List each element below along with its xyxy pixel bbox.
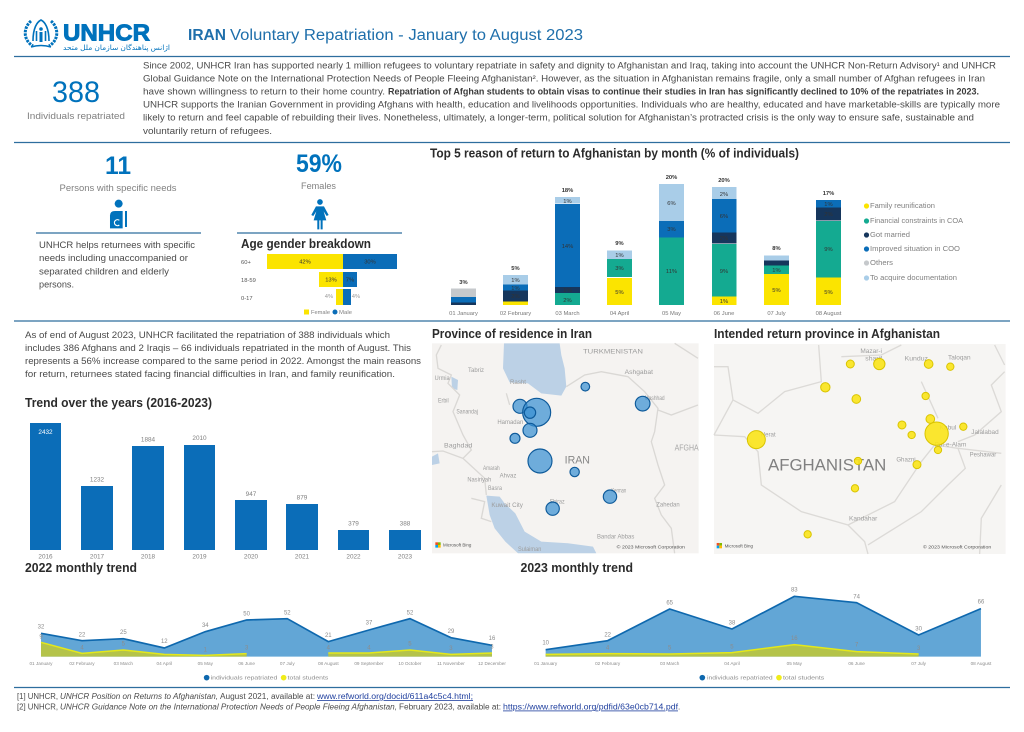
text block: introduction: likely to return and feel capable of rebuilding their lives. Nonetheless, ultimately, a longer-term, political solution for Afghanistan’s protracted crisis is the only way to ensure safe, sustainable and (143, 112, 974, 122)
chart: 2022 area: 10 October (398, 661, 422, 666)
map: Afghanistan: Jalalabad (971, 429, 999, 436)
map: Iran: Nasiriyah (467, 477, 492, 484)
June bar: 06 June (714, 311, 734, 317)
chart legend: Male (339, 310, 352, 316)
chart: 2023 area: 65 (666, 601, 674, 607)
map: Iran: Basra (488, 485, 502, 492)
chart: 2022 area: 9 (39, 634, 43, 640)
heading: 2023 monthly trend: 2023 monthly trend (520, 561, 633, 575)
stat: individuals repatriated: 388 (52, 76, 100, 109)
chart: yearly bars: 2432 (38, 429, 53, 436)
chart: yearly bars: 2021 (295, 554, 310, 560)
chart: 2022 area: 37 (366, 621, 373, 627)
text block: specific needs (39, 239, 195, 290)
chart: 2023 area: 02 February (595, 661, 621, 666)
chart: yearly bars: 2018 (141, 554, 156, 560)
heading: intended return province: Intended return province in Afghanistan (714, 327, 940, 341)
text block: introduction: Repatriation of Afghan students to obtain visas to continue their studies in Iran has significantly declined to 10% of the repatriates in 2023. (388, 86, 979, 96)
July bar: 1% (772, 268, 781, 274)
chart: 2022 area: 32 (38, 624, 45, 630)
chart: 2023 area: 7 (855, 642, 859, 648)
map: Afghanistan: Mazar-i (860, 348, 882, 355)
text block: introduction (143, 60, 1000, 136)
chart: 2022 area: 4 (327, 645, 331, 651)
chart: 2022 area: 3 (449, 646, 453, 652)
icon: UNHCR emblem (25, 20, 57, 47)
chart: 2022 area: 22 (79, 632, 86, 638)
chart: 2022 area: 4 (367, 645, 371, 651)
chart legend: reasons: Family reunification (870, 203, 935, 210)
June bar: 6% (720, 214, 728, 220)
chart: 2022 area: 5 (122, 642, 126, 648)
icon: female figure (311, 199, 329, 229)
chart: 2022 area: 01 January (29, 661, 53, 666)
chart: 2023 area: 30 (915, 626, 923, 632)
chart: 2023 area: 38 (729, 620, 736, 626)
April bar: 5% (615, 290, 624, 296)
panel: province of residence in Iran (432, 327, 699, 553)
map: Afghanistan: Herat (761, 431, 776, 438)
stat label: Persons with specific needs (60, 183, 177, 194)
chart legend: reasons: Improved situation in COO (870, 246, 961, 253)
map: Afghanistan: Ghazni (896, 456, 916, 463)
map: Iran: AFGHA (675, 444, 699, 453)
chart: 2023 area: 04 April (724, 661, 740, 666)
panel: top 5 reasons of return (430, 146, 963, 317)
May bar: 05 May (662, 311, 681, 317)
February bar: 2% (511, 294, 520, 300)
July bar: 07 July (767, 311, 786, 317)
text block: introduction: Global Guidance Note on the International Protection Needs of People Fleeing Afghanistan². However, as the situation in Afghanistan remains fragile, only a small number of Afghan refugees in Iran (143, 74, 985, 84)
chart: age gender pyramid: 13% (325, 278, 337, 284)
chart: age gender pyramid: 4% (325, 294, 333, 300)
map: Iran: Kuwait City (491, 502, 524, 509)
text block: specific needs: UNHCR helps returnees with specific (39, 239, 195, 250)
January bar: 01 January (449, 311, 478, 317)
map: Iran: Bandar Abbas (597, 533, 635, 540)
April bar: 9% (615, 241, 624, 247)
title: Voluntary Repatriation - January to August 2023 (230, 27, 583, 44)
heading: top 5 reasons: Top 5 reason of return to Afghanistan by month (% of individuals) (430, 146, 799, 160)
chart: 2023 area: 74 (853, 594, 861, 600)
chart: 2023 area: 08 August (971, 661, 992, 666)
chart: 2022 area: 12 December (478, 661, 506, 666)
map: Iran: Sulaiman (518, 546, 542, 553)
chart: 2022 area: 11 November (437, 661, 465, 666)
chart: 2023 area: 66 (978, 600, 985, 606)
map: Iran (432, 343, 699, 553)
April bar: 1% (615, 253, 624, 259)
map: Iran: Baghdad (444, 442, 473, 449)
chart legend: reasons: Got married (870, 232, 910, 239)
chart: yearly bars: 947 (246, 491, 257, 498)
chart: 2023 area: 22 (604, 632, 612, 638)
text block: introduction: Since 2002, UNHCR Iran has supported nearly 1 million refugees to voluntary repatriate in safety and dignity to Afghanistan and Iraq, taking into account the UNHCR Non-Return Advisory¹ and UNHCR (143, 60, 997, 70)
February bar: 02 February (500, 311, 531, 317)
text block: summary (25, 329, 421, 379)
May bar: 11% (666, 269, 677, 275)
August bar: 9% (824, 247, 833, 253)
chart: 2022 area: 29 (448, 629, 455, 635)
chart: yearly bars (30, 423, 421, 560)
map: Afghanistan: Kunduz (905, 355, 928, 362)
text block: introduction: UNHCR supports the Iranian Government in providing Afghans with health, education and livelihoods opportunities. Individuals who are healthy, educated and have marketable-skills are typically more (143, 100, 1000, 110)
August bar: 2% (824, 212, 833, 218)
map: Iran: Erbil (438, 397, 449, 404)
title: IRAN (188, 27, 226, 44)
map: Afghanistan: Kandahar (849, 515, 878, 522)
footnotes: [1] UNHCR, (17, 692, 58, 701)
map: Iran: Zahedan (656, 501, 680, 508)
stat label: Females (301, 181, 336, 192)
chart: 2022 area: 02 February (69, 661, 95, 666)
chart: 2022 area: 21 (325, 633, 332, 639)
stat: 11: 11 (105, 152, 131, 180)
chart: 2023 area: 06 June (848, 661, 865, 666)
chart: 2022 area: 06 June (238, 661, 255, 666)
chart: 2023 area: 3 (917, 646, 921, 652)
map: Iran: Shiraz (550, 499, 565, 506)
April bar: 3% (615, 266, 624, 272)
text block: specific needs: persons. (39, 278, 74, 290)
chart: 2022 area: 50 (243, 612, 251, 618)
chart legend: Female (311, 310, 330, 316)
chart: 2022 area: 05 May (198, 661, 214, 666)
May bar: 20% (666, 175, 677, 181)
June bar (712, 178, 736, 317)
map bubbles: provinces in Afghanistan (747, 358, 967, 538)
panel: intended return province in Afghanistan (714, 327, 1006, 554)
panel: 2022 monthly trend (25, 561, 506, 682)
chart: 2023 area: 01 January (534, 661, 558, 666)
map: Iran: IRAN (565, 454, 590, 466)
August bar (816, 191, 842, 317)
chart: yearly bars: 2020 (244, 554, 259, 560)
chart: 2022 area: 3 (490, 645, 494, 651)
map: Iran: Ahvaz (500, 472, 516, 479)
chart: age gender pyramid: 7% (346, 278, 354, 284)
stat: individuals repatriated: Individuals repatriated (27, 111, 125, 122)
footnotes: UNHCR Position on Returns to Afghanistan, (60, 692, 218, 701)
July bar (764, 246, 789, 317)
chart: age gender pyramid: 0-17 (241, 296, 253, 302)
map: Iran: Tabriz (468, 367, 484, 374)
March bar: 1% (563, 288, 572, 294)
June bar: 2% (720, 236, 728, 242)
chart: yearly bars: 388 (400, 520, 411, 528)
chart: yearly bars: 2019 (192, 554, 207, 560)
text block: summary: As of end of August 2023, UNHCR facilitated the repatriation of 388 individuals which (25, 329, 390, 340)
chart: 2022 area: 04 April (157, 661, 172, 666)
March bar (555, 188, 580, 317)
August bar: 17% (823, 191, 834, 197)
chart: 2022 area: 25 (120, 630, 127, 636)
text block: specific needs: separated children and elderly (39, 266, 169, 276)
footnotes (17, 692, 680, 712)
map: Iran: © 2023 Microsoft Corporation (617, 544, 685, 551)
stat: individuals repatriated (27, 76, 125, 122)
August bar: 1% (824, 202, 833, 208)
February bar: 1% (511, 278, 520, 284)
chart: yearly bars: 879 (297, 494, 308, 502)
January bar (449, 280, 478, 317)
July bar: 8% (772, 246, 781, 252)
chart legend: reasons: Others (870, 260, 894, 267)
June bar: 2% (720, 192, 728, 198)
chart: yearly bars: 2016 (38, 554, 53, 560)
chart legend: 2023 (699, 675, 825, 682)
heading: province of residence: Province of residence in Iran (432, 327, 592, 341)
March bar: 2% (563, 298, 572, 304)
map bubbles: provinces in Iran (510, 382, 650, 515)
map: Afghanistan: AFGHANISTAN (768, 456, 886, 475)
map: Iran: Hamadan (497, 419, 524, 426)
chart: 2022 area: 08 August (318, 661, 339, 666)
text block: summary: for return, returnees stated facing financial difficulties in Iran, and family reunification. (25, 368, 395, 379)
text block: specific needs: needs including unaccompanied or (39, 252, 188, 263)
chart: 2023 area: 03 March (660, 661, 680, 666)
chart: 2022 area: 09 September (354, 661, 384, 666)
February bar: 1% (511, 286, 520, 292)
stat: 59%: 59% (296, 150, 342, 178)
chart: yearly bars: 1884 (141, 436, 156, 444)
map: Iran: Sanandaj (456, 408, 478, 415)
March bar: 1% (563, 199, 572, 205)
footnotes: February 2023, available at: (399, 702, 501, 712)
chart: 2022 area: 52 (407, 610, 414, 616)
chart: yearly bars: 1232 (90, 476, 105, 484)
chart: 2022 area: 1 (204, 647, 208, 653)
chart: stacked bars by month (449, 175, 842, 317)
chart legend: 2023: individuals repatriated (707, 676, 773, 682)
chart: age gender pyramid: 18-59 (241, 278, 256, 284)
chart legend: 2023: total students (783, 676, 825, 682)
map: Afghanistan: Microsoft Bing (725, 543, 753, 548)
panel: 2023 monthly trend (520, 561, 992, 682)
chart: 2023 area: 16 (791, 636, 798, 642)
March bar: 18% (562, 188, 573, 194)
map: Iran: Kerman (611, 488, 627, 495)
January bar: 3% (459, 280, 468, 286)
February bar: 5% (511, 266, 520, 272)
chart legend: 2022: individuals repatriated (211, 676, 277, 682)
August bar: 5% (824, 290, 833, 296)
chart: age gender pyramid: 30% (364, 260, 376, 266)
chart: 2022 area: 34 (202, 623, 209, 629)
logo Farsi name: اژانس پناهندگان سازمان ملل متحد (63, 43, 170, 52)
April bar: 04 April (610, 311, 629, 317)
map: Iran: Microsoft Bing (443, 543, 472, 548)
chart: 2023 area: 05 May (787, 661, 803, 666)
heading: 2022 monthly trend: 2022 monthly trend (25, 561, 137, 575)
May bar (659, 175, 684, 317)
chart: yearly bars: 2023 (398, 554, 413, 560)
chart legend: 2022 (204, 675, 329, 682)
footnotes: UNHCR Guidance Note on the International Protection Needs of People Fleeing Afghanistan, (60, 702, 397, 712)
February bar (500, 266, 531, 317)
map: Afghanistan: Pul-e-Alam (935, 441, 967, 448)
chart: age gender pyramid: 4% (352, 294, 360, 300)
June bar: 1% (720, 299, 728, 305)
chart legend (304, 310, 352, 316)
heading: trend over the years: Trend over the years (2016-2023) (25, 396, 212, 410)
chart: 2023 area: 4 (606, 645, 610, 651)
footnotes: August 2021, available at: (220, 692, 315, 701)
footnotes: . (678, 702, 680, 712)
chart: 2023 area: 10 (542, 641, 550, 647)
panel: females and age gender (237, 150, 402, 316)
chart: 2022 area: 5 (408, 641, 412, 647)
map: Iran: Amarah (483, 465, 500, 472)
logo wordmark: UNHCR (63, 20, 150, 46)
chart: 2023 area: 83 (791, 588, 798, 594)
map: Afghanistan (714, 344, 1006, 554)
map: Afghanistan: Taloqan (948, 354, 971, 361)
icon: person with disability (110, 200, 127, 228)
chart: 2023 area: 5 (730, 644, 734, 650)
chart legend: reasons (864, 203, 963, 282)
map: Iran: Urmia (435, 375, 450, 382)
text block: introduction: have shown willingness to return to their home country. (143, 86, 385, 96)
chart: 2022 area: 52 (284, 610, 291, 616)
footnotes: www.refworld.org/docid/611a4c5c4.html; (316, 692, 473, 701)
map: Afghanistan: Kabul (940, 425, 957, 432)
chart: age gender pyramid: 42% (299, 260, 311, 266)
chart: age gender pyramid: 60+ (241, 260, 251, 266)
footnotes: https://www.refworld.org/pdfid/63e0cb714.pdf (503, 702, 679, 712)
text block: introduction: voluntarily return of refugees. (143, 126, 272, 136)
chart legend: reasons: Financial constraints in COA (870, 218, 963, 225)
panel: trend over the years (25, 396, 421, 560)
March bar: 03 March (555, 311, 580, 317)
chart: yearly bars: 2022 (346, 554, 361, 560)
March bar: 14% (562, 244, 573, 250)
chart: 2022 area: 4 (80, 645, 84, 651)
map: Afghanistan: © 2023 Microsoft Corporation (923, 543, 992, 550)
chart: 2022 area: 03 March (114, 661, 133, 666)
chart: 2022 area: 16 (489, 636, 496, 642)
map: Iran: Mashhad (645, 395, 665, 402)
text block: summary: includes 386 Afghans and 2 Iraqis – 66 individuals repatriated in the month of August. This (25, 342, 411, 353)
map: Afghanistan: sharif (865, 355, 882, 362)
footnotes: [2] UNHCR, (17, 702, 58, 712)
chart: 2023 area (534, 588, 992, 682)
chart: 2023 area: 07 July (911, 661, 927, 666)
August bar: 08 August (816, 311, 842, 317)
chart: yearly bars: 2010 (192, 435, 207, 442)
April bar (607, 241, 632, 317)
map: Iran: Ashgabat (625, 369, 653, 376)
May bar: 6% (667, 201, 676, 207)
chart legend: reasons: To acquire documentation (870, 275, 957, 282)
panel: persons with specific needs (36, 152, 201, 290)
May bar: 3% (667, 227, 676, 233)
chart: 2022 area: 12 (161, 639, 168, 645)
logo: UNHCR (25, 20, 170, 52)
text block: summary: represents a 56% increase compared to the same period in 2022. Amongst the main reasons (25, 355, 421, 366)
chart: 2022 area (29, 610, 506, 682)
chart: 2023 area: 5 (668, 645, 672, 651)
chart: 2022 area: 07 July (280, 661, 295, 666)
chart: age gender pyramid (241, 254, 397, 316)
chart: 2022 area: 3 (245, 646, 249, 652)
chart legend: 2022: total students (288, 676, 329, 682)
June bar: 20% (718, 178, 730, 184)
July bar: 5% (772, 288, 781, 294)
chart: yearly bars: 379 (348, 520, 359, 528)
map: Iran: TURKMENISTAN (583, 348, 643, 355)
heading: age gender breakdown: Age gender breakdown (241, 237, 371, 251)
June bar: 9% (720, 269, 728, 275)
map: Iran: Rasht (510, 379, 526, 386)
chart: yearly bars: 2017 (90, 554, 105, 560)
map: Afghanistan: Peshawar (970, 452, 997, 459)
